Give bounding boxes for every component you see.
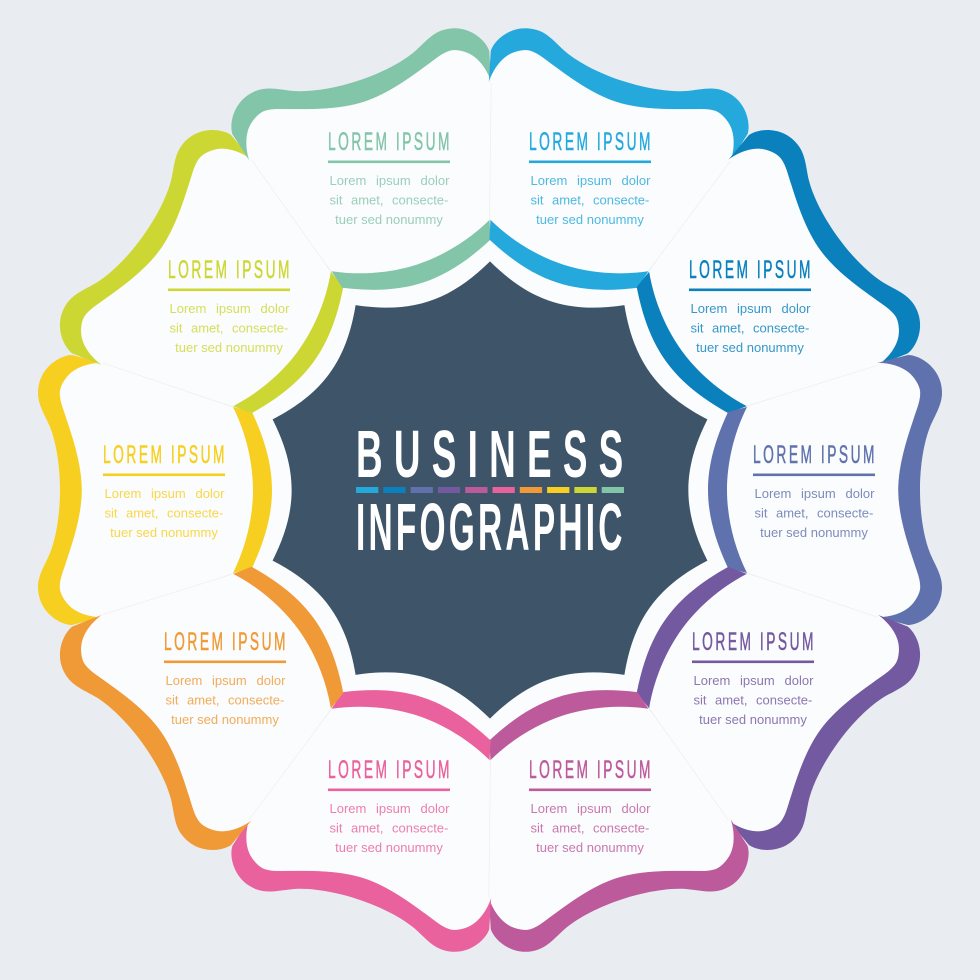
text block: indigo: amet, (776, 506, 809, 520)
text block: sky blue: consecte- (593, 192, 649, 208)
text block: purple: ipsum (740, 673, 775, 688)
text block: blue: Lorem (690, 301, 727, 316)
text block: sky blue: dolor (622, 173, 651, 188)
text block: blue (689, 257, 813, 355)
title word: business: BUSINESS (356, 418, 635, 492)
text block: purple: amet, (715, 692, 748, 708)
text block: pink: tuer sed nonummy (335, 840, 443, 855)
petal: lime (45, 115, 393, 471)
text block: yellow: ipsum (151, 486, 186, 501)
text block: mint: amet, (351, 192, 384, 208)
text block: lime: dolor (260, 301, 290, 316)
text block: purple (692, 629, 816, 727)
text block: lime: tuer sed nonummy (175, 340, 283, 355)
text block: orange: ipsum (212, 673, 247, 688)
text block: sky blue (529, 129, 653, 227)
text block: indigo: tuer sed nonummy (760, 525, 868, 540)
petal: blue (587, 115, 935, 471)
text block: pink: sit (330, 820, 343, 836)
text block: blue: consecte- (753, 320, 809, 336)
text block: lime: consecte- (232, 320, 288, 336)
text block: purple: Lorem (694, 673, 730, 688)
text block: sky blue: amet, (552, 192, 585, 208)
text block: lime: Lorem (170, 301, 206, 316)
text block: yellow: amet, (126, 506, 159, 520)
text block: yellow: LOREM IPSUM (103, 442, 227, 469)
text block: blue: dolor (782, 301, 811, 316)
text block: magenta: dolor (622, 801, 651, 816)
text block: orange: Lorem (166, 673, 202, 688)
petal: sky blue (429, 18, 758, 324)
petal: pink (222, 656, 551, 962)
text block: purple: dolor (784, 673, 814, 688)
text block: lime: LOREM IPSUM (168, 257, 292, 284)
text block: orange: LOREM IPSUM (164, 629, 288, 656)
text block: magenta: LOREM IPSUM (529, 757, 653, 784)
text block: mint: LOREM IPSUM (328, 129, 452, 156)
text block: sky blue: LOREM IPSUM (529, 129, 653, 156)
text block: orange: tuer sed nonummy (171, 712, 279, 727)
text block: yellow (103, 442, 227, 540)
text block: sky blue: sit (530, 192, 544, 208)
text block: orange: sit (166, 692, 179, 708)
text block: blue: sit (690, 320, 704, 336)
text block: lime (168, 257, 292, 355)
petal: orange (45, 509, 393, 865)
text block: magenta: consecte- (593, 820, 649, 836)
text block: magenta (529, 757, 653, 855)
petal: mint (222, 18, 551, 324)
text block: pink: ipsum (376, 801, 411, 816)
text block: pink (328, 757, 452, 855)
text block: blue: LOREM IPSUM (689, 257, 813, 284)
text block: orange: dolor (256, 673, 286, 688)
colour stripe (356, 487, 624, 493)
text block: yellow: Lorem (104, 486, 141, 501)
text block: lime: ipsum (216, 301, 251, 316)
petal: purple (587, 509, 935, 865)
text block: blue: amet, (712, 320, 745, 336)
text block: mint: consecte- (392, 192, 448, 208)
text block: pink: Lorem (330, 801, 366, 816)
text block: orange (164, 629, 288, 727)
text block: orange: amet, (187, 692, 220, 708)
text block: pink: LOREM IPSUM (328, 757, 452, 784)
text block: blue: ipsum (737, 301, 772, 316)
text block: magenta: Lorem (530, 801, 567, 816)
petal: magenta (429, 656, 758, 962)
text block: yellow: consecte- (167, 506, 223, 520)
text block: pink: amet, (351, 820, 384, 836)
text block: indigo: LOREM IPSUM (753, 442, 877, 469)
text block: purple: consecte- (756, 692, 812, 708)
text block: lime: amet, (191, 320, 224, 336)
text block: sky blue: Lorem (530, 173, 567, 188)
text block: indigo: ipsum (801, 486, 836, 501)
text block: indigo: Lorem (754, 486, 791, 501)
title word: infographic: INFOGRAPHIC (356, 491, 626, 565)
text block: yellow: sit (104, 506, 118, 520)
petal: yellow (38, 355, 272, 625)
text block: purple: sit (694, 692, 707, 708)
text block: indigo: dolor (846, 486, 875, 501)
text block: mint: ipsum (376, 173, 411, 188)
text block: sky blue: ipsum (577, 173, 612, 188)
text block: pink: dolor (420, 801, 450, 816)
text block: blue: tuer sed nonummy (696, 340, 804, 355)
text block: magenta: sit (530, 820, 544, 836)
text block: mint: tuer sed nonummy (335, 212, 443, 227)
text block: magenta: tuer sed nonummy (536, 840, 644, 855)
text block: orange: consecte- (228, 692, 284, 708)
text block: magenta: amet, (552, 820, 585, 836)
dark central scalloped badge (273, 261, 707, 719)
text block: mint: sit (330, 192, 343, 208)
text block: mint: dolor (420, 173, 450, 188)
text block: mint: Lorem (330, 173, 366, 188)
text block: yellow: dolor (196, 486, 225, 501)
text block: mint (328, 129, 452, 227)
text block: sky blue: tuer sed nonummy (536, 212, 644, 227)
text block: indigo: sit (754, 506, 768, 520)
text block: magenta: ipsum (577, 801, 612, 816)
text block: yellow: tuer sed nonummy (110, 525, 218, 540)
text block: lime: sit (170, 320, 183, 336)
central white halo (235, 235, 745, 745)
text block: indigo (753, 442, 877, 540)
text block: purple: LOREM IPSUM (692, 629, 816, 656)
text block: pink: consecte- (392, 820, 448, 836)
petal: indigo (708, 355, 942, 625)
title: business infographic (356, 418, 635, 565)
text block: purple: tuer sed nonummy (699, 712, 807, 727)
text block: indigo: consecte- (817, 506, 873, 520)
